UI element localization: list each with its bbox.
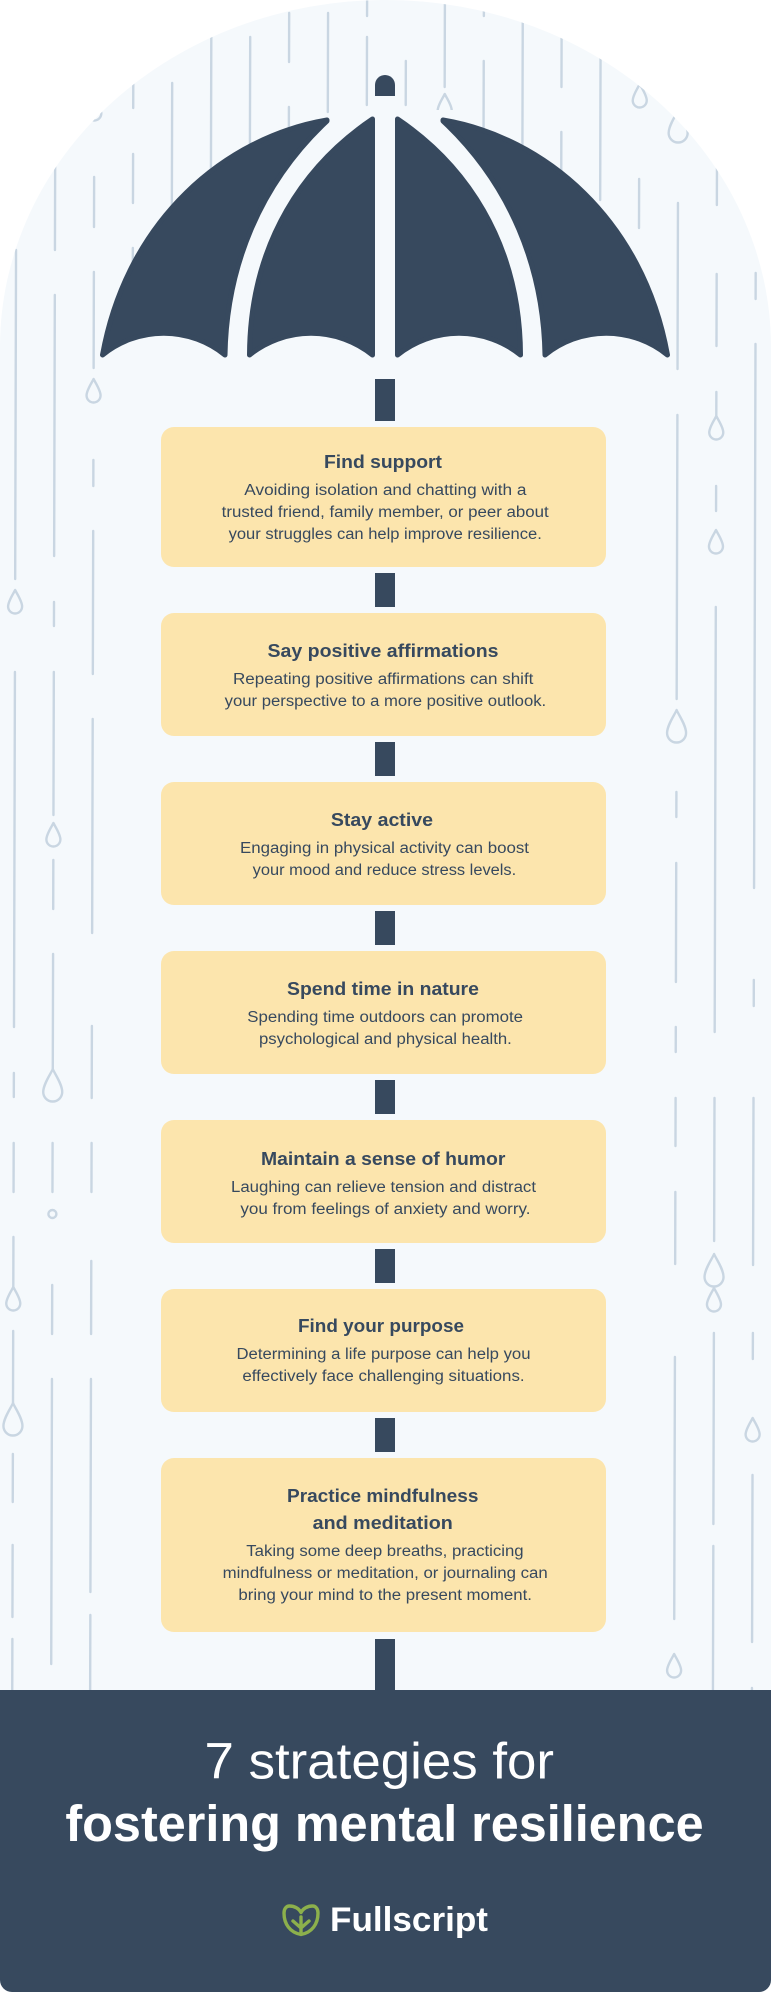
title: fostering mental resilience	[65, 1795, 704, 1852]
text: find your purpose description: effectively face challenging situations.	[242, 1368, 525, 1385]
umbrella panel: far left	[102, 120, 327, 355]
text: find your purpose description: Determining a life purpose can help you	[236, 1346, 530, 1363]
text: maintain a sense of humor description	[231, 1179, 537, 1218]
text: spend time in nature description	[247, 1009, 523, 1048]
panel: stay active	[161, 782, 606, 905]
text: practice mindfulness description: mindfulness or meditation, or journaling can	[223, 1565, 548, 1582]
text: stay active description	[240, 840, 530, 879]
heading: practice mindfulness and meditation: Practice mindfulness	[287, 1485, 478, 1506]
title	[65, 1732, 704, 1852]
text: stay active description: your mood and reduce stress levels.	[253, 862, 516, 879]
panel: practice mindfulness and meditation	[161, 1458, 606, 1632]
text: say positive affirmations description	[225, 671, 546, 710]
text: say positive affirmations description: Repeating positive affirmations can shift	[233, 671, 534, 688]
text: spend time in nature description: psychological and physical health.	[259, 1031, 512, 1048]
text: practice mindfulness description	[223, 1543, 548, 1604]
text: find your purpose description	[236, 1346, 530, 1385]
text: practice mindfulness description: bring your mind to the present moment.	[238, 1587, 532, 1604]
text: find support description	[222, 482, 549, 543]
heading: maintain a sense of humor: Maintain a sense of humor	[261, 1148, 505, 1169]
text: maintain a sense of humor description: Laughing can relieve tension and distract	[231, 1179, 537, 1196]
umbrella pole segments	[375, 379, 395, 1694]
heading: practice mindfulness and meditation	[287, 1485, 478, 1533]
panel: spend time in nature	[161, 951, 606, 1074]
text: find support description: trusted friend, family member, or peer about	[222, 504, 549, 521]
text: find support description: Avoiding isolation and chatting with a	[244, 482, 527, 499]
panel: find your purpose	[161, 1289, 606, 1412]
title: 7 strategies for	[204, 1732, 554, 1790]
logo: Fullscript	[284, 1901, 488, 1939]
heading: find support: Find support	[324, 451, 442, 472]
panel: maintain a sense of humor	[161, 1120, 606, 1243]
text: say positive affirmations description: your perspective to a more positive outlook.	[225, 693, 546, 710]
umbrella panel: inner right	[398, 119, 520, 355]
heading: spend time in nature: Spend time in nature	[287, 978, 479, 999]
panel: footer	[0, 1690, 771, 1992]
panel: say positive affirmations	[161, 613, 606, 736]
icon: umbrella canopy	[102, 119, 668, 355]
text: find support description: your struggles can help improve resilience.	[229, 526, 542, 543]
heading: find your purpose: Find your purpose	[298, 1315, 464, 1336]
text: spend time in nature description: Spending time outdoors can promote	[247, 1009, 523, 1026]
heading: practice mindfulness and meditation: and meditation	[313, 1512, 453, 1533]
umbrella panel: inner left	[250, 119, 372, 355]
umbrella panel: far right	[443, 120, 668, 355]
text: practice mindfulness description: Taking some deep breaths, practicing	[246, 1543, 524, 1560]
icon: umbrella tip	[375, 75, 395, 96]
wordmark: Fullscript	[330, 1901, 488, 1939]
text: stay active description: Engaging in physical activity can boost	[240, 840, 530, 857]
heading: say positive affirmations: Say positive affirmations	[268, 640, 498, 661]
text: maintain a sense of humor description: you from feelings of anxiety and worry.	[240, 1201, 530, 1218]
heading: stay active: Stay active	[331, 809, 433, 830]
icon: leaf	[284, 1906, 318, 1934]
panel: find support	[161, 427, 606, 567]
